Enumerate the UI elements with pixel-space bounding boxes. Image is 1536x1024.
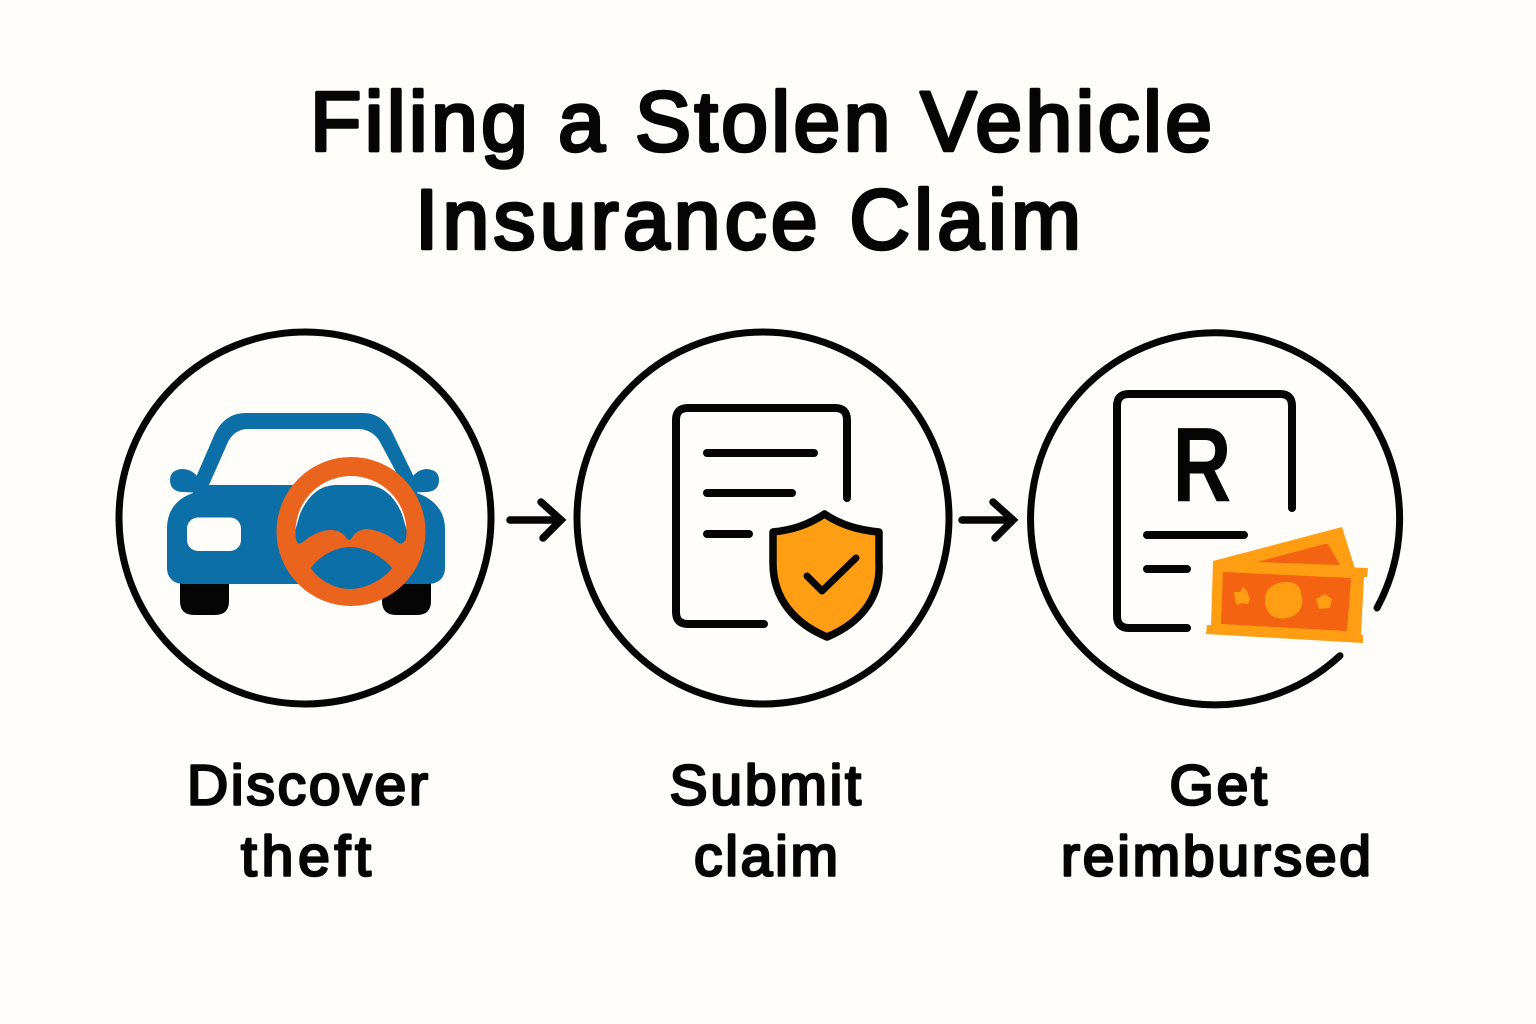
panel: step 2 submit claim [577, 332, 949, 889]
icon: banknotes [1206, 527, 1368, 643]
step 2 label [670, 754, 861, 889]
step 1 label: Discover [187, 754, 428, 818]
step 2 label: claim [694, 825, 838, 889]
front banknote [1206, 562, 1368, 643]
icon: car with steering wheel [167, 413, 445, 615]
title: Insurance Claim [415, 172, 1081, 266]
step 1 label: theft [241, 825, 371, 889]
icon: reimbursement document [1117, 394, 1292, 628]
icon: claim document [676, 408, 847, 624]
car mirrors [170, 469, 439, 493]
arrow: step 2 to step 3 [962, 502, 1013, 538]
document letter R: R [1172, 406, 1232, 524]
step 3 label: Get [1170, 754, 1267, 818]
step 3 broken circle [1031, 333, 1400, 705]
icon: shield with check [773, 514, 879, 637]
car windshield [209, 429, 403, 485]
arrow: step 1 to step 2 [510, 502, 561, 538]
step 3 label: reimbursed [1061, 825, 1371, 889]
car headlight [187, 518, 241, 551]
step 2 circle [577, 332, 949, 704]
step 3 label [1061, 754, 1371, 889]
car body [167, 413, 445, 584]
title: Filing a Stolen Vehicle [310, 74, 1212, 168]
back banknote [1213, 527, 1356, 572]
step 1 circle [119, 332, 491, 704]
step 1 label [187, 754, 428, 889]
panel: step 3 get reimbursed [1031, 333, 1400, 889]
step 2 label: Submit [670, 754, 861, 818]
steering wheel [286, 466, 416, 602]
title [310, 74, 1212, 266]
panel: step 1 discover theft [119, 332, 491, 889]
banknote motifs [1234, 582, 1332, 619]
car wheels [180, 580, 431, 615]
